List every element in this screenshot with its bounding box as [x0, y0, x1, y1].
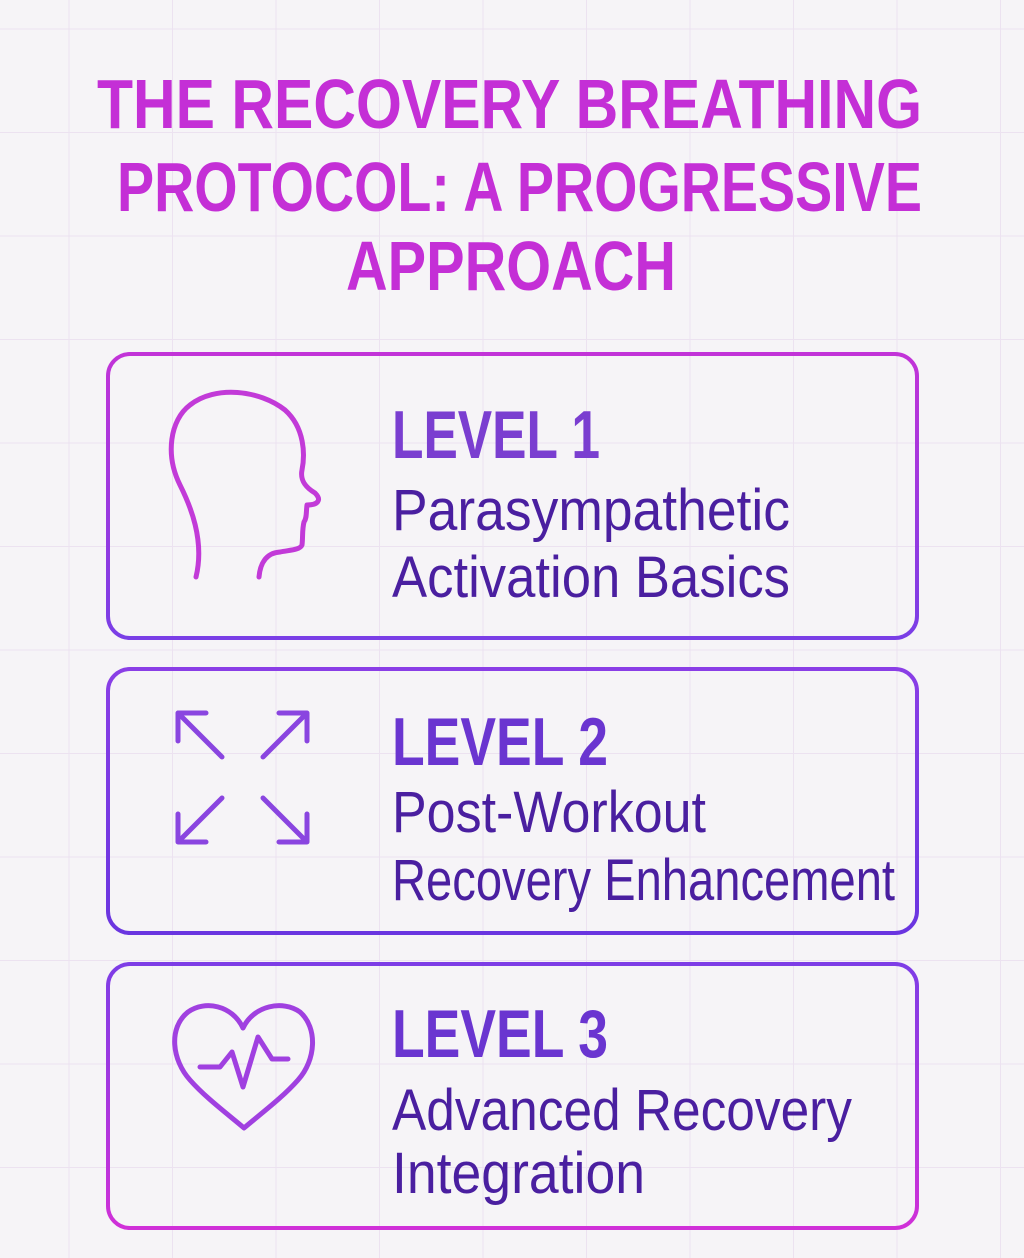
text: level 1: Activation Basics [392, 545, 790, 610]
icon: expand arrows [178, 713, 307, 842]
text: level 1: Parasympathetic [392, 478, 790, 543]
panel: level 1 [108, 354, 917, 638]
title [97, 65, 922, 305]
text: level 3: Advanced Recovery [392, 1078, 852, 1143]
text: level 2: Post-Workout [392, 780, 706, 845]
text: level 2: LEVEL 2 [392, 704, 608, 780]
text: level 1 [392, 397, 790, 610]
text: level 3: Integration [392, 1141, 645, 1206]
panel: level 2 [108, 669, 917, 933]
text: level 1: LEVEL 1 [392, 397, 600, 473]
icon: heart with pulse [175, 1006, 313, 1128]
text: level 3 [392, 996, 852, 1206]
panel: level 3 [108, 964, 917, 1228]
text: level 3: LEVEL 3 [392, 996, 608, 1072]
icon: head [171, 392, 318, 577]
text: level 2 [392, 704, 895, 913]
text: level 2: Recovery Enhancement [392, 848, 895, 913]
title: APPROACH [346, 227, 676, 305]
